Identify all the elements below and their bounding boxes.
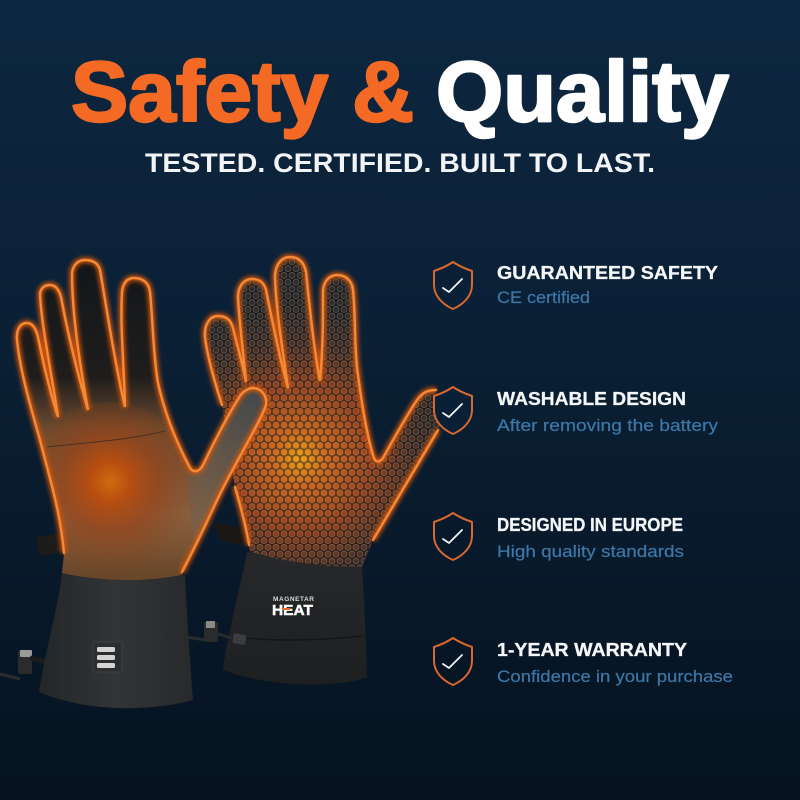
left glove hand [17, 260, 266, 580]
icon: shield check [434, 513, 472, 560]
icon: shield check [434, 638, 472, 685]
icon: shield check [434, 387, 472, 434]
heading: 1-YEAR WARRANTY [497, 639, 688, 660]
left glove power button [93, 642, 122, 672]
description: High quality standards [497, 542, 684, 561]
right glove logo: HEAT [272, 602, 313, 619]
right glove strap [213, 522, 243, 546]
title word: Safety &: Safety & [71, 45, 414, 140]
subtitle: TESTED. CERTIFIED. BUILT TO LAST. [145, 148, 655, 178]
left glove cuff [39, 573, 193, 708]
feature: washable design [434, 387, 719, 435]
right glove logo: MAGNETAR [273, 596, 314, 603]
heading: GUARANTEED SAFETY [497, 262, 719, 283]
feature: guaranteed safety [434, 262, 719, 309]
icon: shield check [434, 262, 472, 309]
right glove hand [205, 257, 440, 567]
heading: WASHABLE DESIGN [497, 388, 686, 409]
right glove: back view with hexagon grip [186, 257, 440, 685]
right glove cuff [223, 552, 367, 685]
title [71, 45, 729, 140]
feature: warranty [434, 638, 733, 686]
feature: designed in europe [434, 513, 684, 561]
right glove zipper tab [232, 633, 247, 645]
right glove cable connector [186, 621, 232, 642]
title word: Quality: Quality [436, 45, 729, 140]
right glove cuff pocket seam [235, 636, 362, 640]
left glove side strap [36, 533, 62, 556]
description: Confidence in your purchase [497, 667, 733, 686]
left glove cable connector [0, 650, 48, 679]
description: After removing the battery [497, 416, 719, 435]
left glove: palm view [0, 260, 266, 708]
right glove logo [272, 596, 314, 619]
description: CE certified [497, 288, 590, 307]
heading: DESIGNED IN EUROPE [497, 514, 683, 535]
feature list [434, 262, 733, 686]
